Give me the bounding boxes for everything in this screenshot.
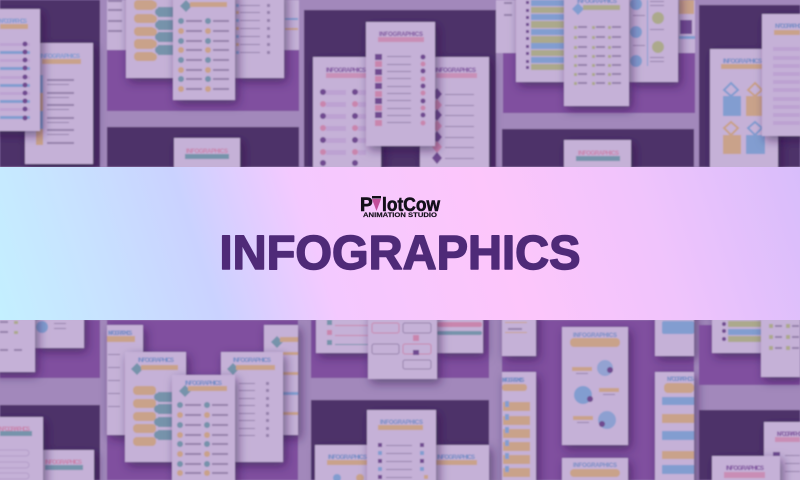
panel: top centre-right mockup: INFOGRAPHICS (578, 151, 619, 157)
panel: bottom centre-right mockup: INFOGRAPHICS (502, 378, 525, 384)
panel: top right mockup (699, 5, 800, 179)
banner: gradient title band (0, 167, 800, 320)
panel: top centre mockup: INFOGRAPHICS (435, 68, 476, 74)
panel: top centre mockup (304, 10, 496, 177)
panel: bottom centre-right mockup (502, 310, 694, 480)
panel: bottom centre-right mockup: INFOGRAPHICS (573, 333, 617, 339)
panel: bottom centre-left mockup: INFOGRAPHICS (138, 358, 174, 364)
panel: top right mockup: INFOGRAPHICS (723, 59, 762, 65)
panel: bottom centre mockup: INFOGRAPHICS (380, 420, 423, 426)
panel: top left dark mockup (0, 0, 100, 167)
logo: PilotCow Animation Studio: Pi (360, 195, 378, 216)
panel: bottom left mockup: INFOGRAPHICS (45, 460, 82, 466)
panel: bottom centre-left mockup: INFOGRAPHICS (185, 381, 222, 387)
icon: pen nib (372, 196, 381, 211)
panel: bottom centre mockup: INFOGRAPHICS (437, 455, 475, 461)
panel: bottom centre-left mockup: INFOGRAPHICS (108, 331, 132, 337)
panel: bottom centre-right mockup: INFOGRAPHICS (667, 377, 694, 383)
panel: top centre-left mockup: INFOGRAPHICS (186, 149, 228, 155)
panel: top left dark mockup: INFOGRAPHICS (40, 54, 80, 60)
panel: bottom centre-left mockup (107, 320, 298, 480)
panel: top centre mockup: INFOGRAPHICS (379, 32, 423, 38)
panel: bottom left mockup (0, 310, 100, 480)
panel: top centre-left mockup (107, 0, 299, 178)
panel: bottom centre mockup: INFOGRAPHICS (328, 455, 367, 461)
logo: PilotCow Animation Studio (360, 195, 440, 219)
logo: PilotCow Animation Studio: lotCow (382, 195, 440, 216)
panel: bottom centre-left mockup: INFOGRAPHICS (233, 358, 271, 364)
title: INFOGRAPHICS (220, 227, 580, 280)
panel: bottom centre mockup (311, 310, 489, 480)
panel: top centre-right mockup (496, 0, 695, 180)
panel: bottom centre-right mockup: INFOGRAPHICS (573, 463, 617, 469)
panel: bottom right mockup (699, 310, 800, 480)
logo: PilotCow Animation Studio: ANIMATION STUDIO (363, 212, 437, 219)
panel: bottom right mockup: INFOGRAPHICS (726, 466, 764, 472)
panel: top centre mockup: INFOGRAPHICS (326, 68, 366, 74)
